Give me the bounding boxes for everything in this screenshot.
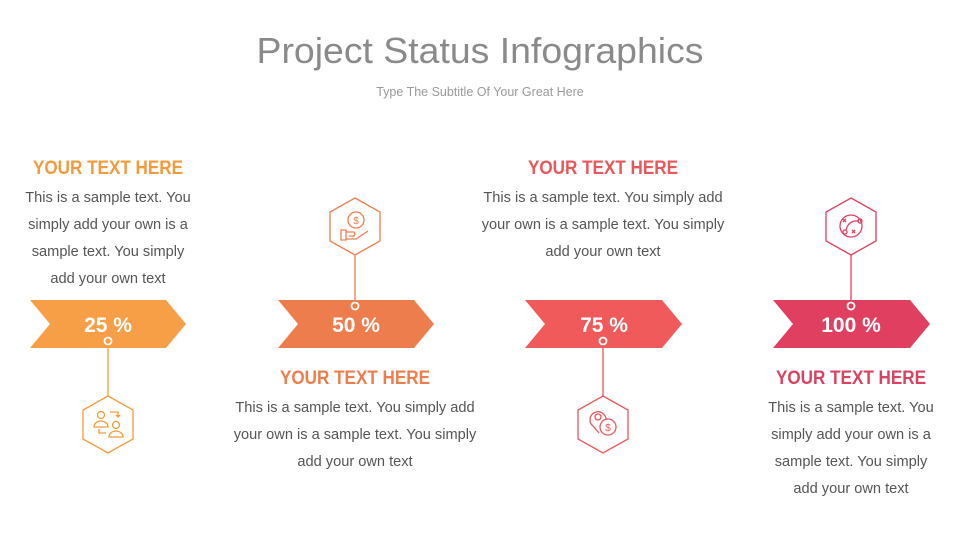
step 1: 25% xyxy=(25,158,191,453)
icon hex 2 + connector xyxy=(330,198,380,302)
chevron 50% xyxy=(278,300,434,348)
text block 2: add your own text xyxy=(297,454,413,470)
text block 3: add your own text xyxy=(545,244,661,260)
text block 1: sample text. You simply xyxy=(32,244,185,260)
subtitle: Type The Subtitle Of Your Great Here xyxy=(376,85,584,99)
text block 4: This is a sample text. You xyxy=(768,400,934,416)
chevron 100% xyxy=(773,300,930,348)
chevron 75%: 75 % xyxy=(580,314,628,337)
chevron 50%: 50 % xyxy=(332,314,380,337)
title: Project Status Infographics xyxy=(256,30,704,71)
step 4: 100% xyxy=(768,198,934,497)
heading 2: YOUR TEXT HERE xyxy=(280,368,430,389)
heading 1: YOUR TEXT HERE xyxy=(33,158,183,179)
text block 4: simply add your own is a xyxy=(771,427,932,443)
text block 2: This is a sample text. You simply add xyxy=(235,400,475,416)
connector + icon hex 3 xyxy=(578,338,628,453)
text block 4: add your own text xyxy=(793,481,909,497)
chevron 75% xyxy=(525,300,682,348)
text block 1 xyxy=(25,190,191,287)
connector + icon hex 1 xyxy=(83,338,133,453)
heading 3: YOUR TEXT HERE xyxy=(528,158,678,179)
text block 2: your own is a sample text. You simply xyxy=(234,427,477,443)
text block 4 xyxy=(768,400,934,497)
chevron 100%: 100 % xyxy=(821,314,881,337)
text block 1: This is a sample text. You xyxy=(25,190,191,206)
chevron 25% xyxy=(30,300,186,348)
text block 4: sample text. You simply xyxy=(775,454,928,470)
step 3: 75% xyxy=(482,158,725,453)
chevron 25%: 25 % xyxy=(84,314,132,337)
text block 3 xyxy=(482,190,725,260)
text block 2 xyxy=(234,400,477,470)
connector + icon hex 3: $ xyxy=(605,423,611,434)
text block 1: add your own text xyxy=(50,271,166,287)
step 2: 50% xyxy=(234,198,477,470)
icon hex 4 + connector xyxy=(826,198,876,302)
heading 4: YOUR TEXT HERE xyxy=(776,368,926,389)
text block 3: This is a sample text. You simply add xyxy=(483,190,723,206)
text block 3: your own is a sample text. You simply xyxy=(482,217,725,233)
icon hex 2 + connector: $ xyxy=(353,216,359,227)
text block 1: simply add your own is a xyxy=(28,217,189,233)
